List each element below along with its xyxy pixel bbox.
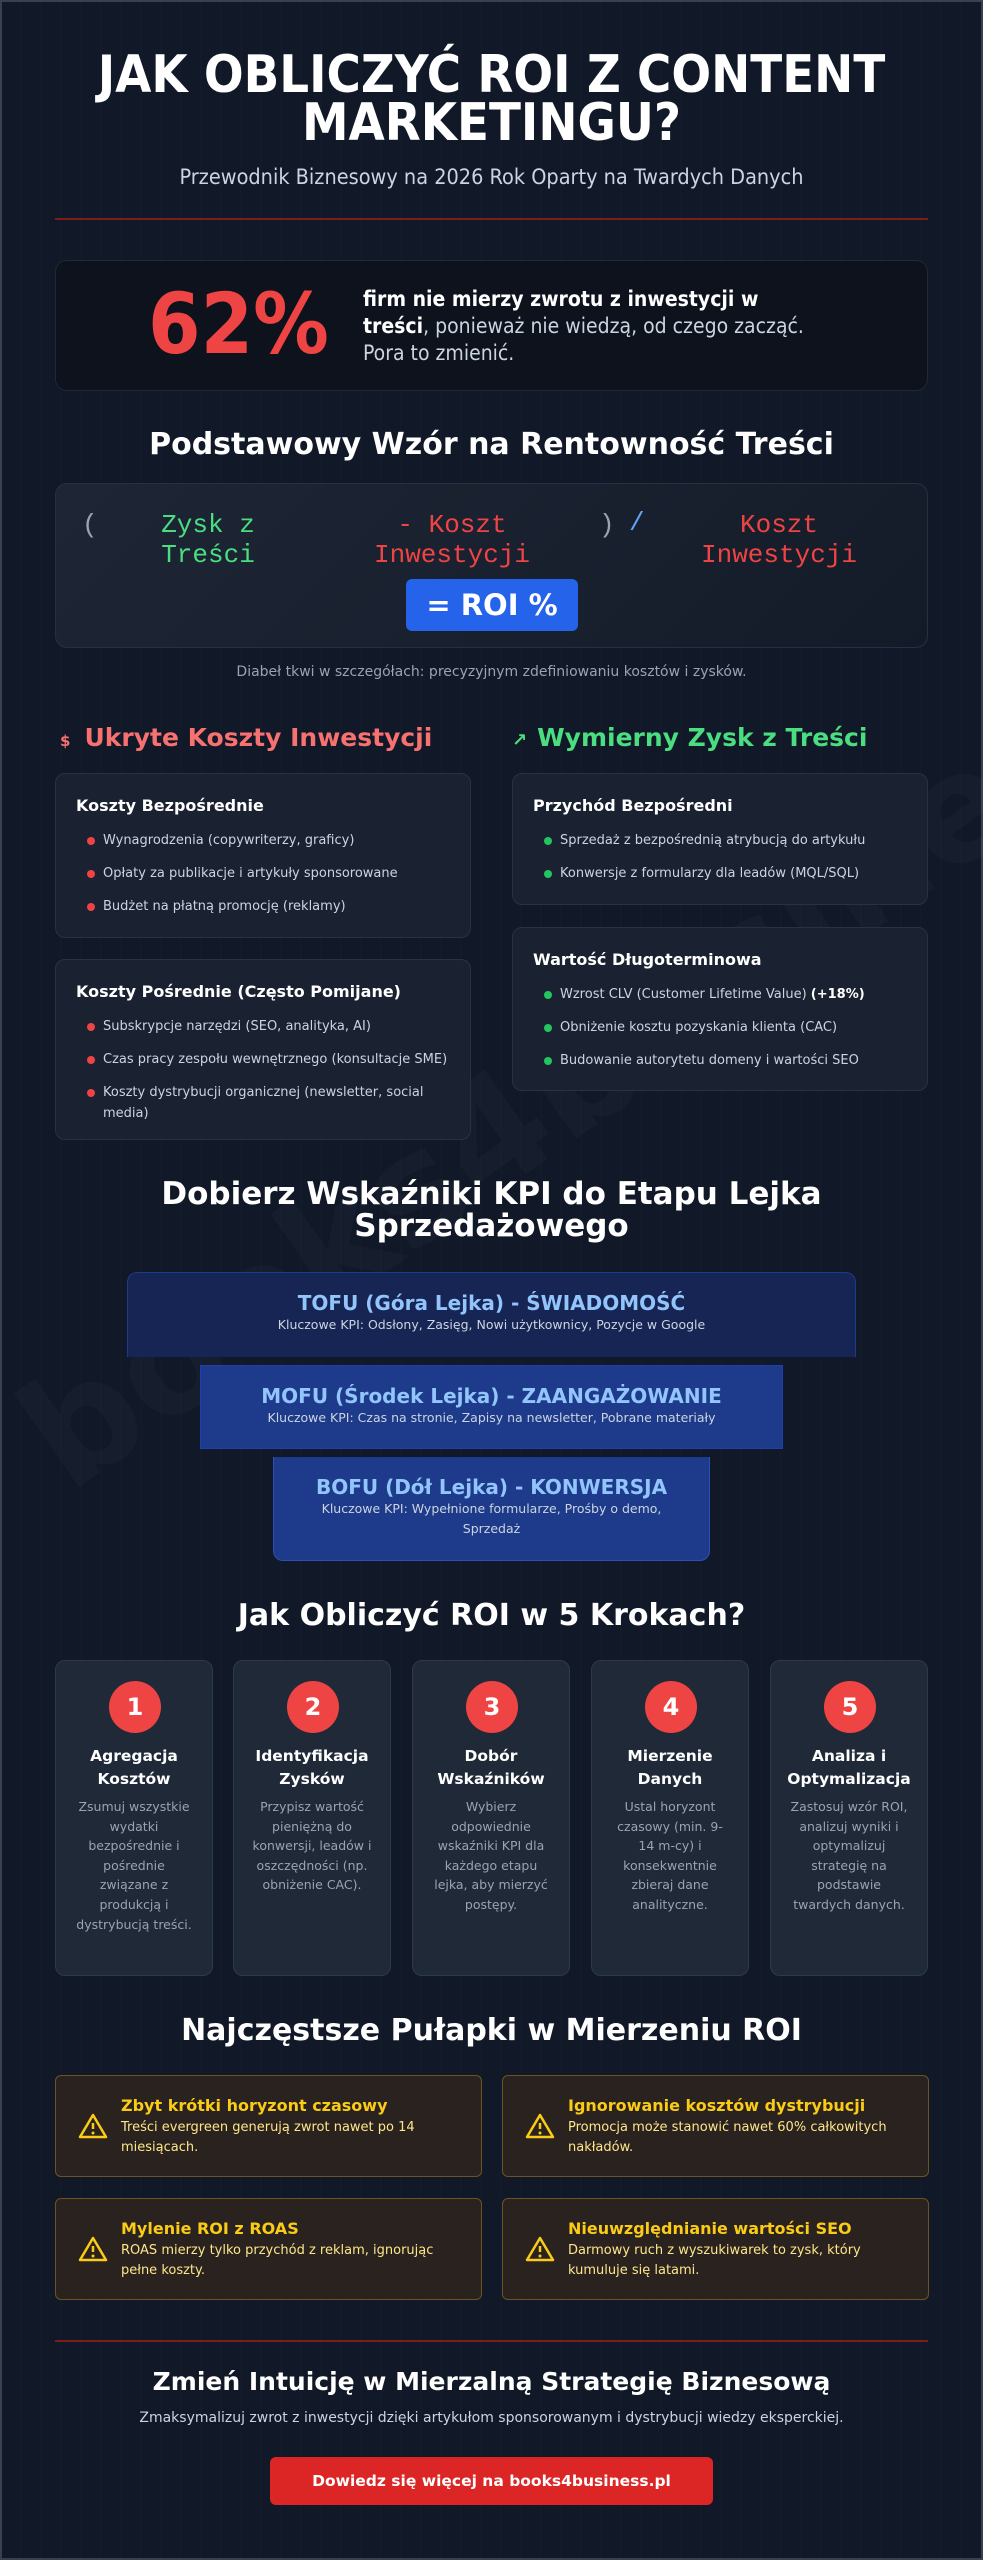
step 3: Wskaźników (437, 1770, 545, 1788)
card: long-term value: Obniżenie kosztu pozyskania klienta (CAC) (560, 1020, 837, 1035)
title: JAK OBLICZYĆ ROI Z CONTENT (98, 45, 885, 105)
formula: divisor: Koszt (740, 510, 818, 540)
card: direct revenue (512, 773, 928, 905)
step 1: Zsumuj wszystkie wydatki bezpośrednie i pośrednie związane z produkcją i dystrybucją treści. (76, 1799, 192, 1932)
step 5: Analiza i (812, 1747, 886, 1765)
step 5: Zastosuj wzór ROI, analizuj wyniki i optymalizuj strategię na podstawie twardych danych. (791, 1799, 907, 1912)
step 2: Identyfikacja (255, 1747, 369, 1765)
pitfall 2 (502, 2075, 929, 2177)
heading: pitfalls: Najczęstsze Pułapki w Mierzeniu ROI (181, 2013, 802, 2048)
formula: gain (161, 510, 255, 570)
card: direct costs: Opłaty za publikacje i artykuły sponsorowane (103, 866, 398, 881)
funnel: MOFU: Kluczowe KPI: Czas na stronie, Zapisy na newsletter, Pobrane materiały (268, 1410, 716, 1425)
title: MARKETINGU? (302, 93, 681, 153)
heading: KPI funnel: Dobierz Wskaźniki KPI do Etapu Lejka (161, 1176, 822, 1212)
formula: cost: Inwestycji (374, 540, 530, 570)
card: indirect costs: Czas pracy zespołu wewnętrznego (konsultacje SME) (103, 1052, 447, 1067)
step 4: Ustal horyzont czasowy (min. 9-14 m-cy) i konsekwentnie zbieraj dane analityczne. (617, 1799, 723, 1912)
pitfall 2: Promocja może stanowić nawet 60% całkowitych nakładów. (568, 2120, 887, 2155)
card: indirect costs (55, 959, 471, 1140)
step 2: 2 (305, 1693, 321, 1721)
card: direct costs: Budżet na płatną promocję (reklamy) (103, 899, 346, 914)
stat panel (55, 260, 928, 391)
formula: gain: Zysk z (161, 510, 255, 540)
card: direct costs: Wynagrodzenia (copywriterzy, graficy) (103, 833, 354, 848)
formula: cost (374, 510, 530, 570)
step 5 (770, 1660, 928, 1976)
funnel: BOFU: BOFU (Dół Lejka) - KONWERSJA (316, 1475, 667, 1499)
pitfall 1 (55, 2075, 482, 2177)
ROI badge: = ROI % (426, 588, 558, 622)
caption: Diabeł tkwi w szczegółach: precyzyjnym zdefiniowaniu kosztów i zysków. (236, 664, 747, 680)
heading: KPI funnel (161, 1176, 822, 1244)
ROI badge (406, 579, 578, 631)
card: direct revenue: Konwersje z formularzy dla leadów (MQL/SQL) (560, 866, 859, 881)
big number: 62% (148, 275, 329, 373)
footer heading: Zmień Intuicję w Mierzalną Strategię Biznesową (153, 2367, 830, 2396)
funnel: TOFU: Kluczowe KPI: Odsłony, Zasięg, Nowi użytkownicy, Pozycje w Google (278, 1317, 705, 1332)
heading: gains: ↗ Wymierny Zysk z Treści (512, 723, 867, 752)
step 3: Wybierz odpowiednie wskaźniki KPI dla każdego etapu lejka, aby mierzyć postępy. (434, 1799, 548, 1912)
formula panel: / (629, 508, 645, 538)
CTA button (270, 2457, 713, 2505)
card: long-term value: Budowanie autorytetu domeny i wartości SEO (560, 1053, 859, 1068)
step 1: Agregacja (90, 1747, 178, 1765)
funnel: BOFU: Kluczowe KPI: Wypełnione formularze, Prośby o demo, Sprzedaż (322, 1501, 661, 1536)
funnel: MOFU: MOFU (Środek Lejka) - ZAANGAŻOWANIE (261, 1384, 722, 1408)
formula panel (55, 483, 928, 648)
card: direct costs: Koszty Bezpośrednie (76, 796, 264, 815)
step 4: 4 (663, 1693, 679, 1721)
card: long-term value: Wartość Długoterminowa (533, 950, 762, 969)
funnel: TOFU (127, 1272, 856, 1357)
card: direct costs (55, 773, 471, 938)
step 2 (233, 1660, 391, 1976)
heading: KPI funnel: Sprzedażowego (354, 1208, 629, 1244)
pitfall 2: Ignorowanie kosztów dystrybucji (568, 2096, 865, 2115)
step 3 (412, 1660, 570, 1976)
formula: divisor: Inwestycji (701, 540, 857, 570)
subtitle: Przewodnik Biznesowy na 2026 Rok Oparty na Twardych Danych (179, 165, 804, 190)
heading: formula: Podstawowy Wzór na Rentowność Treści (149, 427, 834, 462)
pitfall 1: Zbyt krótki horyzont czasowy (121, 2096, 388, 2115)
pitfall 4: Darmowy ruch z wyszukiwarek to zysk, który kumuluje się latami. (568, 2243, 861, 2278)
step 4 (591, 1660, 749, 1976)
step 4: Danych (638, 1770, 702, 1788)
formula: divisor (701, 510, 857, 570)
step 1 (55, 1660, 213, 1976)
CTA button: Dowiedz się więcej na books4business.pl (312, 2472, 671, 2490)
stat text: Pora to zmienić. (363, 341, 514, 365)
pitfall 1: Treści evergreen generują zwrot nawet po 14 miesiącach. (121, 2120, 415, 2155)
card: indirect costs: Koszty Pośrednie (Często Pomijane) (76, 982, 401, 1001)
card: direct revenue: Przychód Bezpośredni (533, 796, 733, 815)
pitfall 3: ROAS mierzy tylko przychód z reklam, ignorując pełne koszty. (121, 2243, 433, 2278)
footer text: Zmaksymalizuj zwrot z inwestycji dzięki artykułom sponsorowanym i dystrybucji wiedzy eksperckiej. (139, 2410, 844, 2426)
card: indirect costs: Subskrypcje narzędzi (SEO, analityka, AI) (103, 1019, 371, 1034)
step 4: Mierzenie (627, 1747, 713, 1765)
formula: gain: Treści (161, 540, 255, 570)
step 1: Kosztów (97, 1770, 170, 1788)
title (95, 44, 886, 153)
card: long-term value: Wzrost CLV (Customer Lifetime Value) (+18%) (560, 987, 865, 1002)
step 1: 1 (127, 1693, 143, 1721)
pitfall 3 (55, 2198, 482, 2300)
stat text (363, 287, 804, 365)
funnel: MOFU (200, 1365, 783, 1449)
card: indirect costs: Koszty dystrybucji organicznej (newsletter, social media) (103, 1085, 423, 1121)
formula panel: ) (599, 510, 615, 540)
card: long-term value (512, 927, 928, 1091)
card: direct revenue: Sprzedaż z bezpośrednią atrybucją do artykułu (560, 833, 865, 848)
step 3: Dobór (465, 1747, 517, 1765)
funnel: TOFU: TOFU (Góra Lejka) - ŚWIADOMOŚĆ (298, 1291, 685, 1315)
stat text: firm nie mierzy zwrotu z inwestycji w (363, 287, 758, 311)
pitfall 4: Nieuwzględnianie wartości SEO (568, 2219, 852, 2238)
step 2: Przypisz wartość pieniężną do konwersji, leadów i oszczędności (np. obniżenie CAC). (253, 1799, 371, 1892)
formula panel: ( (82, 510, 98, 540)
pitfall 3: Mylenie ROI z ROAS (121, 2219, 299, 2238)
step 5: 5 (842, 1693, 858, 1721)
funnel: BOFU (273, 1457, 710, 1561)
stat text: treści, ponieważ nie wiedzą, od czego zacząć. (363, 314, 804, 338)
heading: costs: $ Ukryte Koszty Inwestycji (60, 723, 432, 752)
formula: cost: - Koszt (397, 510, 507, 540)
step 5: Optymalizacja (787, 1770, 911, 1788)
step 2: Zysków (279, 1770, 345, 1788)
step 3: 3 (484, 1693, 500, 1721)
pitfall 4 (502, 2198, 929, 2300)
heading: 5 steps: Jak Obliczyć ROI w 5 Krokach? (238, 1598, 745, 1633)
